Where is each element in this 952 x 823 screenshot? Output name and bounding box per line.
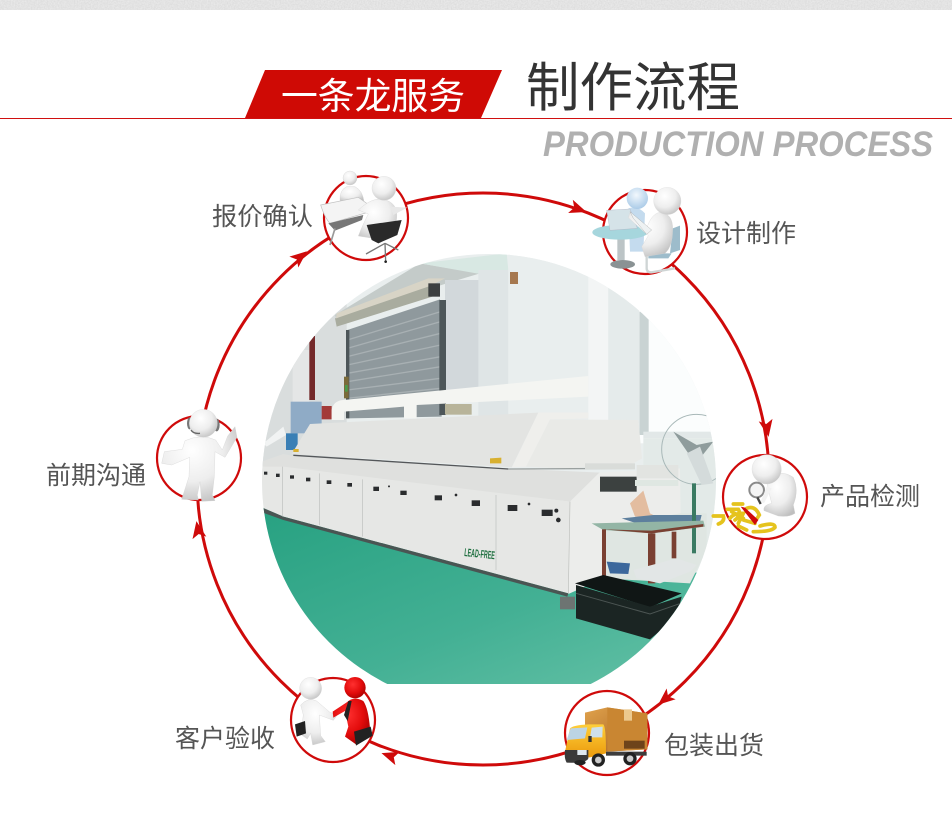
step label: 设计制作: 设计制作 (696, 220, 796, 248)
floor (264, 508, 697, 684)
machine hood (292, 413, 642, 469)
heading badge: 一条龙服务: 一条龙服务 (281, 76, 465, 117)
arrow: to quotation (289, 246, 311, 267)
step label: 前期沟通: 前期沟通 (46, 462, 146, 490)
step label: 包装出货: 包装出货 (664, 732, 764, 760)
step: 报价确认 quotation icon (321, 171, 408, 263)
factory photo: LEAD-FREE (464, 547, 496, 562)
step label: 产品检测: 产品检测 (820, 483, 920, 511)
step: 客户验收 handshake icon (291, 677, 375, 762)
header rule (0, 118, 952, 119)
step label: 报价确认: 报价确认 (212, 203, 313, 231)
arrow: to packing (654, 688, 676, 710)
step: 包装出货 truck icon (565, 691, 649, 775)
arrow: to inspection (759, 419, 775, 438)
title: 制作流程: 制作流程 (526, 59, 740, 118)
step: 产品检测 inspection icon (713, 455, 807, 539)
top textured band (0, 0, 952, 10)
process ring (190, 193, 775, 765)
factory photo (260, 250, 732, 690)
subtitle: PRODUCTION PROCESS: PRODUCTION PROCESS (543, 125, 933, 164)
heading badge: 一条龙服务 (245, 70, 502, 118)
step label: 客户验收: 客户验收 (175, 725, 275, 753)
arrow: to acceptance (379, 746, 400, 765)
step: 前期沟通 consultant icon (157, 409, 241, 501)
arrow: to design (568, 200, 589, 219)
arrow: to communication (190, 520, 206, 539)
step: 设计制作 design icon (592, 187, 687, 274)
machine body (260, 449, 681, 609)
